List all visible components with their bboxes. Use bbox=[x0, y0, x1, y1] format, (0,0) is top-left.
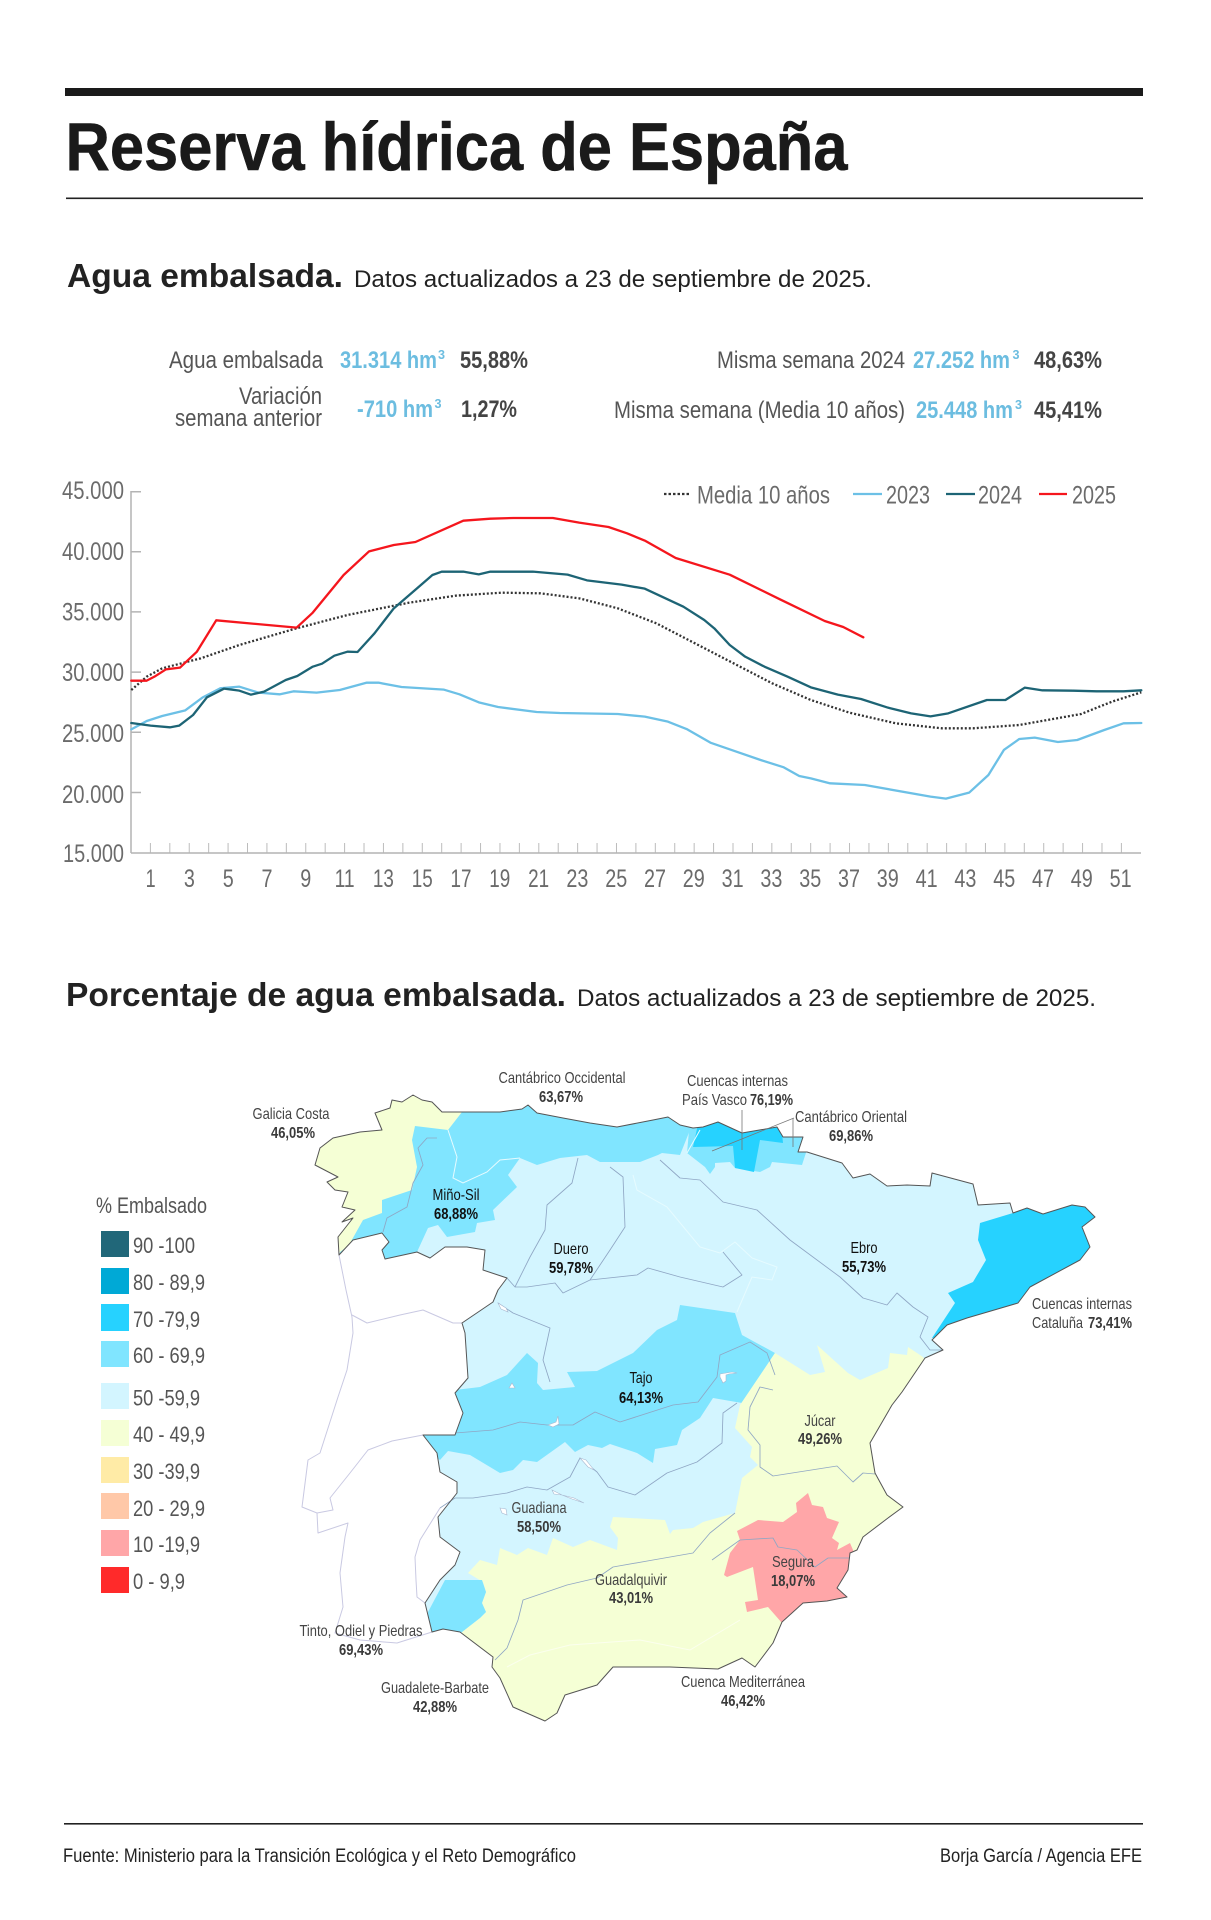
label: Cuencas internas Cataluña: Cataluña bbox=[1032, 1315, 1083, 1332]
x axis: 29 bbox=[683, 865, 705, 893]
rivers bbox=[383, 1138, 943, 1660]
y axis bbox=[62, 477, 141, 868]
region: Galicia Costa (40-49,9) bbox=[316, 1096, 462, 1252]
label: Cuenca Mediterránea: Cuenca Mediterránea bbox=[681, 1674, 805, 1691]
label: Tinto, Odiel y Piedras: 69,43% bbox=[339, 1642, 383, 1659]
x axis: 35 bbox=[799, 865, 821, 893]
label: Cuencas internas Cataluña bbox=[1032, 1296, 1132, 1332]
x axis: 39 bbox=[877, 865, 899, 893]
label: Cuencas internas País Vasco: Cuencas internas bbox=[687, 1073, 788, 1090]
chart legend: 2025 bbox=[1072, 482, 1116, 510]
label: Tinto, Odiel y Piedras: Tinto, Odiel y Piedras bbox=[300, 1623, 422, 1640]
label: Guadalete-Barbate bbox=[381, 1680, 489, 1716]
x axis: 13 bbox=[373, 865, 394, 893]
x axis: 25 bbox=[605, 865, 627, 893]
stats: left block bbox=[169, 347, 528, 432]
x axis: 51 bbox=[1110, 865, 1132, 893]
y axis: 40.000 bbox=[62, 538, 124, 566]
label: Júcar: Júcar bbox=[804, 1413, 836, 1430]
x axis: 47 bbox=[1032, 865, 1054, 893]
label: Ebro: Ebro bbox=[850, 1240, 878, 1257]
stat: agua embalsada: Agua embalsada bbox=[169, 347, 324, 374]
x axis: 41 bbox=[916, 865, 938, 893]
label: Cuenca Mediterránea bbox=[681, 1674, 805, 1710]
x axis bbox=[131, 843, 1141, 893]
map legend: 60 - 69,9 bbox=[133, 1343, 205, 1368]
Portugal lines and rivers bbox=[302, 1255, 462, 1643]
basin regions bbox=[316, 1096, 1094, 1720]
stats: right block bbox=[614, 347, 1102, 424]
label: Galicia Costa: 46,05% bbox=[271, 1125, 315, 1142]
series: 2023 bbox=[131, 683, 1141, 799]
label: Cuencas internas Cataluña: Cuencas internas bbox=[1032, 1296, 1132, 1313]
map legend: 80 - 89,9 bbox=[133, 1270, 205, 1295]
x axis: 37 bbox=[838, 865, 860, 893]
stat: agua embalsada: 55,88% bbox=[460, 347, 528, 374]
label: Cuencas internas País Vasco bbox=[682, 1073, 793, 1109]
label: Cantábrico Oriental: Cantábrico Oriental bbox=[795, 1109, 907, 1126]
stat: misma semana 2024 bbox=[717, 347, 1102, 374]
series: 2024 bbox=[131, 572, 1141, 727]
x axis: 21 bbox=[528, 865, 549, 893]
label: Duero bbox=[549, 1241, 593, 1277]
label: Cantábrico Occidental: Cantábrico Occidental bbox=[498, 1070, 626, 1087]
stat: misma semana media 10 años: Misma semana (Media 10 años) bbox=[614, 397, 905, 424]
footer: source: Fuente: Ministerio para la Transición Ecológica y el Reto Demográfico bbox=[63, 1846, 576, 1867]
label: Miño-Sil: 68,88% bbox=[434, 1206, 478, 1223]
label: Cantábrico Oriental bbox=[795, 1109, 907, 1145]
label: Cantábrico Occidental: 63,67% bbox=[539, 1089, 583, 1106]
x axis: 11 bbox=[335, 865, 355, 893]
y axis: 45.000 bbox=[62, 477, 124, 505]
heading: porcentaje de agua embalsada: Porcentaje de agua embalsada. bbox=[66, 977, 566, 1014]
label: Guadiana: Guadiana bbox=[512, 1500, 567, 1517]
region: Tajo (60-69,9) bbox=[410, 1305, 775, 1473]
region: Cantábrico Oriental (60-69,9) bbox=[687, 1128, 806, 1174]
label: Ebro bbox=[842, 1240, 886, 1276]
map legend: 40 - 49,9 bbox=[133, 1422, 205, 1447]
label: Tajo: Tajo bbox=[630, 1370, 653, 1387]
map legend: 50 -59,9 bbox=[133, 1386, 200, 1410]
leader lines bbox=[712, 1110, 794, 1151]
x axis: 43 bbox=[954, 865, 976, 893]
label: Guadalquivir: Guadalquivir bbox=[595, 1572, 668, 1589]
chart legend: 2024 bbox=[978, 482, 1022, 510]
chart legend bbox=[664, 482, 1116, 510]
map legend: 0 - 9,9 bbox=[133, 1569, 185, 1594]
x axis: 27 bbox=[644, 865, 666, 893]
label: Guadalete-Barbate: Guadalete-Barbate bbox=[381, 1680, 489, 1697]
stat: misma semana media 10 años: 3 bbox=[1015, 397, 1022, 412]
label: Cantábrico Occidental bbox=[498, 1070, 626, 1106]
basin divider lines bbox=[448, 1130, 777, 1667]
region: Miño-Sil and Cantábrico Occidental (60-69,9) bbox=[340, 1106, 690, 1258]
label: Segura: Segura bbox=[772, 1554, 814, 1571]
label: Segura: 18,07% bbox=[771, 1573, 815, 1590]
label: Ebro: 55,73% bbox=[842, 1259, 886, 1276]
x axis: 15 bbox=[412, 865, 433, 893]
reservoirs bbox=[498, 1303, 737, 1515]
series: 2025 bbox=[131, 518, 863, 681]
x axis: 19 bbox=[489, 865, 510, 893]
heading: porcentaje de agua embalsada bbox=[66, 977, 1096, 1014]
chart legend: Media 10 años bbox=[697, 482, 830, 510]
region: Cuencas internas Cataluña (70-79,9) bbox=[932, 1206, 1094, 1338]
stat: variación semana anterior: 3 bbox=[434, 396, 442, 411]
label: Guadalquivir bbox=[595, 1572, 668, 1607]
label: Segura bbox=[771, 1554, 815, 1590]
map legend: 30 -39,9 bbox=[133, 1459, 200, 1484]
region: Duero, Ebro, Guadiana (50-59,9) bbox=[339, 1133, 1012, 1633]
heading: agua embalsada: Datos actualizados a 23 de septiembre de 2025. bbox=[354, 266, 872, 293]
x axis: 17 bbox=[450, 865, 472, 893]
stat: variación semana anterior: semana anterior bbox=[175, 405, 322, 432]
region: Cuencas internas País Vasco (70-79,9) bbox=[693, 1122, 783, 1172]
heading: porcentaje de agua embalsada: Datos actualizados a 23 de septiembre de 2025. bbox=[577, 985, 1096, 1012]
label: Cantábrico Oriental: 69,86% bbox=[829, 1128, 873, 1145]
x axis: 31 bbox=[722, 865, 744, 893]
label: Cuencas internas Cataluña: 73,41% bbox=[1088, 1315, 1132, 1332]
map legend: 20 - 29,9 bbox=[133, 1496, 205, 1521]
label: Júcar: 49,26% bbox=[798, 1431, 842, 1448]
x axis: 49 bbox=[1071, 865, 1093, 893]
label: Duero: 59,78% bbox=[549, 1260, 593, 1277]
x axis: 5 bbox=[223, 865, 234, 893]
stat: agua embalsada bbox=[169, 347, 528, 374]
label: Cuencas internas País Vasco: 76,19% bbox=[750, 1092, 793, 1109]
stat: misma semana 2024: Misma semana 2024 bbox=[717, 347, 905, 374]
x axis: 23 bbox=[566, 865, 588, 893]
stat: variación semana anterior: 1,27% bbox=[461, 396, 517, 423]
map legend: 70 -79,9 bbox=[133, 1307, 200, 1332]
label: Tajo bbox=[619, 1370, 663, 1407]
stat: variación semana anterior: Variación bbox=[239, 383, 322, 410]
x axis: 3 bbox=[184, 865, 195, 893]
heading: agua embalsada bbox=[67, 258, 872, 295]
label: Guadalete-Barbate: 42,88% bbox=[413, 1699, 457, 1716]
line chart bbox=[62, 477, 1141, 893]
stat: agua embalsada: 31.314 hm bbox=[340, 347, 437, 374]
stat: misma semana 2024: 3 bbox=[1012, 347, 1020, 362]
label: Galicia Costa bbox=[252, 1106, 330, 1142]
label: Guadalquivir: 43,01% bbox=[609, 1590, 653, 1607]
y axis: 30.000 bbox=[62, 659, 124, 687]
label: Tajo: 64,13% bbox=[619, 1390, 663, 1407]
label: Galicia Costa: Galicia Costa bbox=[252, 1106, 330, 1123]
stat: misma semana media 10 años: 25.448 hm bbox=[916, 397, 1013, 424]
stat: misma semana 2024: 48,63% bbox=[1034, 347, 1102, 374]
heading: agua embalsada: Agua embalsada. bbox=[67, 258, 343, 295]
stat: variación semana anterior bbox=[175, 383, 517, 432]
chart legend: 2023 bbox=[886, 482, 930, 510]
footer: credit: Borja García / Agencia EFE bbox=[940, 1846, 1142, 1867]
label: Guadiana bbox=[512, 1500, 567, 1536]
label: Miño-Sil: Miño-Sil bbox=[432, 1187, 480, 1204]
label: Tinto, Odiel y Piedras bbox=[300, 1623, 422, 1659]
label: Duero: Duero bbox=[554, 1241, 589, 1258]
label: Cuenca Mediterránea: 46,42% bbox=[721, 1693, 765, 1710]
x axis: 9 bbox=[300, 865, 311, 893]
stat: variación semana anterior: -710 hm bbox=[357, 396, 433, 423]
label: Cuencas internas País Vasco: País Vasco bbox=[682, 1092, 747, 1109]
map legend bbox=[96, 1193, 207, 1594]
region: Segura (10-19,9) bbox=[724, 1493, 854, 1622]
map legend: 10 -19,9 bbox=[133, 1532, 200, 1557]
stat: misma semana media 10 años: 45,41% bbox=[1034, 397, 1102, 424]
map of Spain bbox=[300, 1080, 1120, 1740]
map legend: 90 -100 bbox=[133, 1233, 195, 1258]
stat: misma semana 2024: 27.252 hm bbox=[913, 347, 1010, 374]
map legend: % Embalsado bbox=[96, 1193, 207, 1218]
label: Júcar bbox=[798, 1413, 842, 1448]
y axis: 15.000 bbox=[63, 840, 124, 868]
label: Miño-Sil bbox=[432, 1187, 480, 1223]
title: Reserva hídrica de España bbox=[66, 109, 849, 185]
coastline bbox=[315, 1095, 1095, 1721]
stat: agua embalsada: 3 bbox=[438, 347, 445, 362]
x axis: 33 bbox=[760, 865, 782, 893]
y axis: 25.000 bbox=[62, 720, 124, 748]
region: Júcar, Guadalquivir, Mediterránea (40-49,9) bbox=[462, 1345, 924, 1720]
y axis: 20.000 bbox=[62, 781, 124, 809]
x axis: 45 bbox=[993, 865, 1015, 893]
region: Tinto, Odiel y Piedras (60-69,9) bbox=[428, 1580, 486, 1632]
map labels bbox=[252, 1070, 1132, 1716]
series: media 10 años bbox=[131, 593, 1141, 728]
x axis: 1 bbox=[146, 865, 156, 893]
label: Guadiana: 58,50% bbox=[517, 1519, 561, 1536]
y axis: 35.000 bbox=[62, 598, 124, 626]
x axis: 7 bbox=[262, 865, 272, 893]
